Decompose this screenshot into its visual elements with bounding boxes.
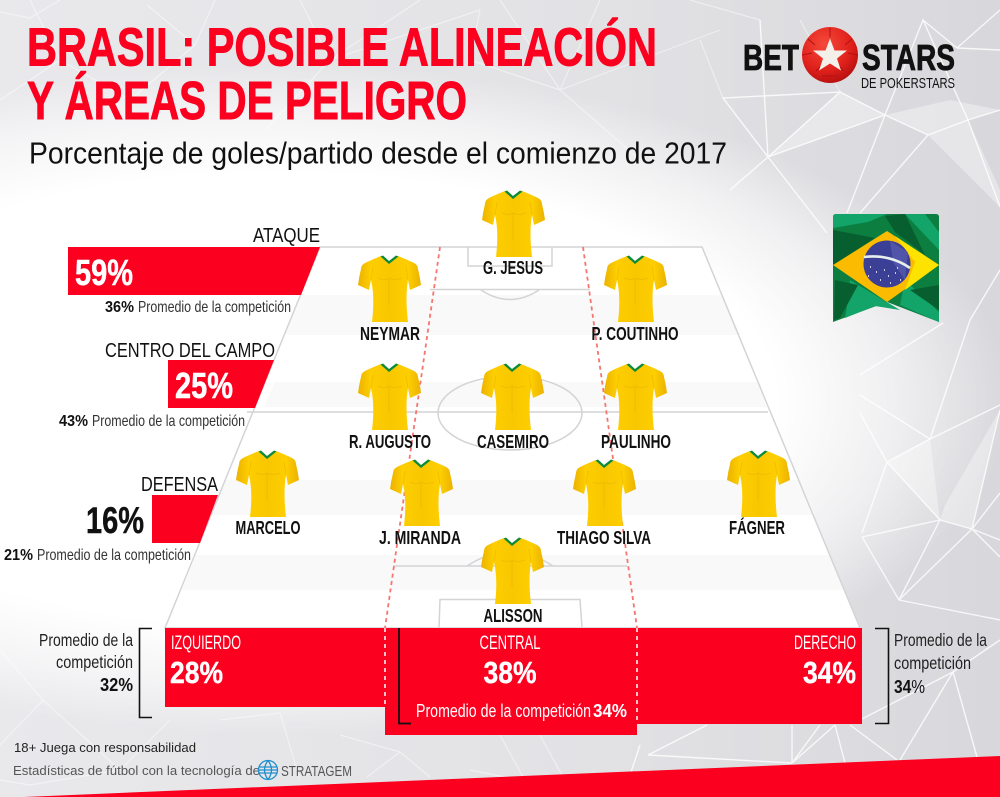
stat: defence: DEFENSA [141,474,219,496]
left competition average: 32% [100,675,133,695]
left competition average [39,628,152,718]
stats credit: STRATAGEM [281,763,352,780]
player: Neymar [358,256,421,344]
icon: Brazil flag ribbon [833,214,939,322]
left competition average: competición [56,652,133,672]
player: P. Coutinho: P. COUTINHO [592,324,678,344]
stat: attack: 36% [105,299,134,316]
player: Marcelo: MARCELO [236,518,300,538]
player: Fágner [727,450,790,538]
logo: Betstars: BET [743,37,799,78]
panel: left flank [165,628,385,707]
stats credit: Estadísticas de fútbol con la tecnología de [13,763,260,778]
logo: Betstars: DE POKERSTARS [861,75,955,92]
stats credit [13,760,352,780]
player: Neymar: NEYMAR [360,324,420,344]
player: Paulinho [601,364,671,452]
panel: right flank [637,628,862,724]
panel: right flank: 34% [803,655,856,690]
panel: central: 34% [593,701,627,721]
stat: midfield: 25% [175,365,233,406]
logo: Betstars [743,27,955,92]
title: BRASIL: POSIBLE ALINEACIÓN [27,18,657,78]
stat: defence: 16% [86,500,144,541]
panel: central: CENTRAL [480,633,540,654]
stat: midfield [59,340,275,430]
stat: attack: 59% [75,252,133,293]
player: G. Jesus [482,190,545,278]
left competition average: Promedio de la [39,630,133,650]
player: R. Augusto: R. AUGUSTO [349,432,431,452]
panel: central: Promedio de la competición [416,701,591,721]
player: R. Augusto [349,364,431,452]
player: Casemiro [477,364,549,452]
player: P. Coutinho [592,256,678,344]
player: Marcelo [236,450,300,538]
player: G. Jesus: G. JESUS [483,258,543,278]
stat: midfield: CENTRO DEL CAMPO [105,340,275,362]
panel: right flank: DERECHO [794,633,856,654]
player: Paulinho: PAULINHO [601,432,671,452]
player: Thiago Silva [557,460,651,548]
stat: attack [68,225,320,316]
stat: midfield: Promedio de la competición [92,413,245,430]
stat: defence [4,474,219,564]
player: Alisson: ALISSON [484,606,542,626]
panel: left flank: IZQUIERDO [171,633,241,654]
subtitle: Porcentaje de goles/partido desde el comienzo de 2017 [29,136,727,170]
player: J. Miranda [379,460,461,548]
stat: midfield: 43% [59,413,88,430]
player: Fágner: FÁGNER [729,517,785,538]
stat: defence: Promedio de la competición [37,547,191,564]
player: Casemiro: CASEMIRO [477,432,549,452]
title [27,18,657,131]
stat: attack: Promedio de la competición [138,299,291,316]
responsible gambling note: 18+ Juega con responsabilidad [14,740,196,755]
panel: central [385,628,637,735]
panel: central: 38% [484,655,536,690]
right competition average: 34% [894,677,925,697]
football pitch [165,247,860,628]
right competition average: competición [894,653,971,673]
panel: left flank: 28% [170,655,223,690]
title: Y ÁREAS DE PELIGRO [27,71,467,131]
logo: Betstars: STARS [862,37,955,78]
player: Alisson [481,538,544,626]
player: J. Miranda: J. MIRANDA [379,528,461,548]
player: Thiago Silva: THIAGO SILVA [557,528,651,548]
stat: attack: ATAQUE [253,225,320,247]
footer red band [0,756,1000,797]
right competition average [875,628,987,724]
stat: defence: 21% [4,547,33,564]
